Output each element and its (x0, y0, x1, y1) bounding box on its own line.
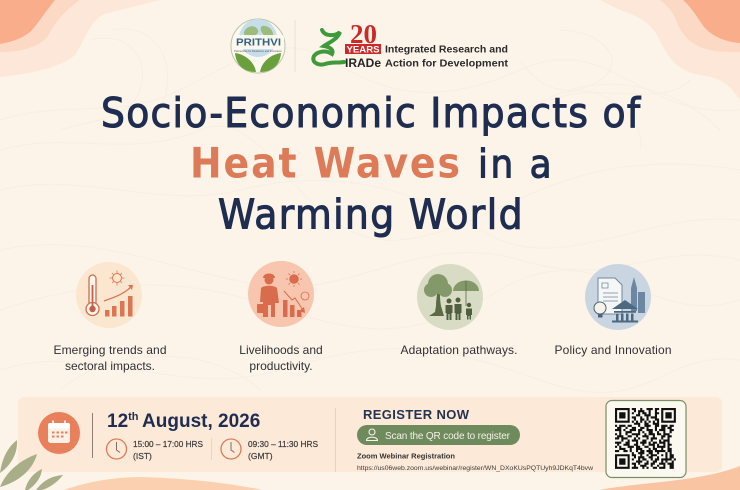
icon label: livelihoods: productivity. (249, 359, 313, 373)
20: 20 (350, 19, 377, 49)
bottom hill shapes (64, 466, 740, 490)
swirl emblem (313, 30, 344, 65)
icon: tree, family and umbrella (417, 264, 483, 330)
decorative leaves (0, 440, 63, 490)
background corner: top right (600, 0, 740, 100)
logo: IRADe 20 years (313, 19, 509, 70)
icon: calendar (38, 412, 80, 454)
tagline line one: Integrated Research and (385, 44, 508, 56)
time GMT (248, 439, 318, 461)
years badge (345, 44, 381, 54)
event date: 12 (107, 411, 128, 432)
registration url: https://us06web.zoom.us/webinar/register/WN_DXoKUsPQTUyh9JDKqT4bvw (357, 465, 593, 472)
time GMT: 09:30 – 11:30 HRS (248, 439, 318, 449)
logo: PRITHVI: PRITHVI (236, 36, 281, 48)
background corner: top left (0, 0, 160, 77)
event date: August, 2026 (142, 411, 260, 432)
QR code card (606, 400, 686, 478)
icon: clock IST (106, 439, 126, 459)
icon: worker and falling bars (248, 261, 314, 327)
icon label: livelihoods (239, 343, 323, 373)
logo: IRADe 20 years: YEARS (346, 44, 380, 54)
title line three: Warming World (218, 191, 523, 239)
register heading: REGISTER NOW (363, 407, 470, 422)
event date: th (128, 411, 139, 423)
icon: clock GMT (221, 439, 241, 459)
logo: PRITHVI (231, 19, 285, 73)
time IST (133, 439, 203, 461)
event details band (18, 397, 722, 472)
icon label: emerging trends (54, 343, 166, 373)
icon label: policy: Policy and Innovation (554, 343, 672, 357)
icon label: adaptation: Adaptation pathways. (400, 343, 518, 357)
icon: thermometer and rising bars (76, 262, 142, 328)
title line one: Socio-Economic Impacts of (101, 90, 641, 137)
time IST: (IST) (133, 451, 152, 461)
time GMT: (GMT) (248, 451, 273, 461)
title (101, 90, 641, 239)
icon label: emerging trends: Emerging trends and (54, 343, 166, 357)
icon: policy document, city and institution (585, 264, 651, 330)
tagline line two: Action for Development (385, 58, 509, 70)
zoom registration label: Zoom Webinar Registration (357, 454, 455, 460)
IRADe name: IRADe (345, 58, 381, 70)
time IST: 15:00 – 17:00 HRS (133, 439, 203, 449)
icon label: emerging trends: sectoral impacts. (65, 359, 155, 373)
logo: PRITHVI: Partnership for Resilience and Innovation (234, 49, 282, 53)
register pill (357, 425, 520, 445)
icon label: livelihoods: Livelihoods and (239, 343, 323, 357)
title line two end: in a (478, 141, 552, 187)
title highlight: Heat Waves (190, 140, 460, 188)
register pill: Scan the QR code to register (385, 431, 511, 442)
